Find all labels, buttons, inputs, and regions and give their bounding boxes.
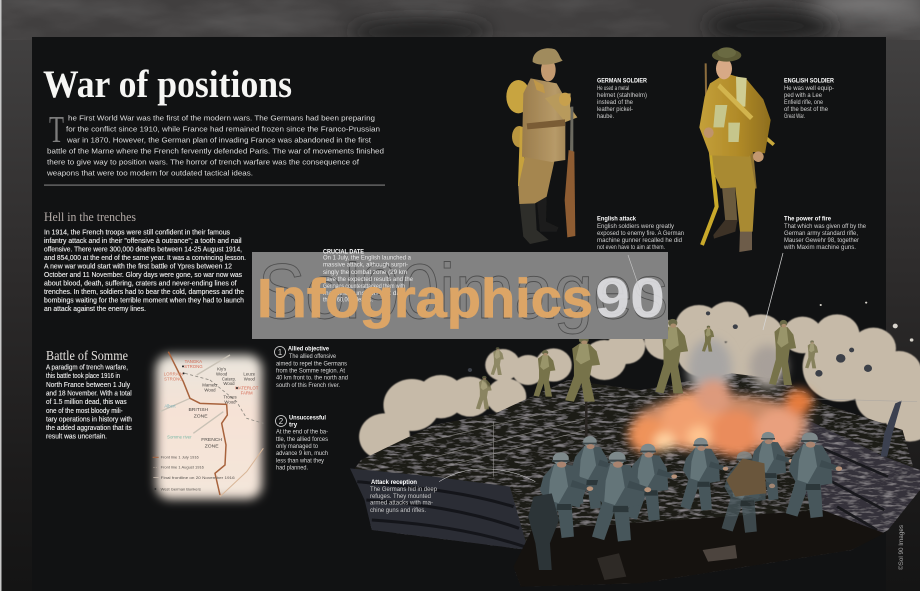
map labels: Leuze	[243, 372, 256, 377]
trench floor	[514, 510, 884, 587]
text: crucial date box: singly the combat zone (29 km	[323, 269, 407, 276]
intro text block: for the conflict since 1910, while France had remained frozen since the Franco-Prussian	[66, 124, 380, 134]
annotation 1: Allied objective: south of this French river.	[276, 382, 340, 389]
text: crucial date box: On 1 July, the English launched a	[323, 254, 411, 262]
text: crucial date box: machine guns. On that day,	[323, 290, 405, 297]
ground: charred slope	[354, 373, 920, 587]
text block: Hell in the trenches: A new war would start with the first battle of Ypres between 12	[44, 262, 232, 270]
text: English attack: English soldiers were greatly	[597, 223, 675, 230]
map labels: Trones	[223, 395, 237, 400]
illustration: English soldier	[699, 47, 775, 252]
callout: Attack reception: refuges. They mounted	[370, 493, 432, 500]
title: War of positions	[43, 63, 292, 106]
annotation 1: Allied objective	[274, 346, 348, 389]
text: The power of fire: German army standard rifle,	[784, 230, 858, 237]
map labels: Caterp.	[222, 376, 236, 381]
text: crucial date box: Germans counterattacked them with	[323, 283, 405, 290]
text block: Hell in the trenches: an attack against the enemy lines.	[44, 304, 146, 313]
text block: Hell in the trenches: In 1914, the French troops were still confident in their famous	[44, 228, 230, 236]
illustration: German soldier	[506, 48, 577, 244]
callout: Attack reception	[370, 479, 438, 514]
text: crucial date box: CRUCIAL DATE	[323, 248, 365, 256]
text: German soldier: haube.	[597, 113, 614, 120]
map legend: Final frontline on 20 November 1916	[161, 475, 236, 480]
trench wall: right planks	[797, 401, 920, 550]
text: crucial date box: there 60,000 deaths.	[323, 296, 373, 304]
map labels	[164, 359, 259, 450]
text: English attack: English attack	[597, 216, 636, 222]
annotation 2: Unsuccessful try: ttle, the allied forces	[276, 436, 328, 443]
text: German soldier: GERMAN SOLDIER	[597, 78, 647, 84]
text: German soldier: instead of the	[597, 99, 633, 106]
map labels: LORRAIN	[164, 372, 183, 377]
arrow: leader line from English attack	[628, 255, 640, 290]
callout: Attack reception: The Germans hid in deep	[370, 486, 438, 493]
map labels: Wood	[223, 381, 235, 386]
icon: number 1: 1	[278, 348, 283, 357]
map legend: Front line 1 August 1916	[161, 465, 205, 470]
intro text block: there to give way to position wars. The horror of trench warfare was the consequence of	[47, 158, 360, 166]
text: The power of fire: with Maxim machine guns.	[783, 244, 856, 251]
annotation 2: Unsuccessful try: only managed to	[276, 443, 318, 450]
credit: ©Sol 90 Images	[898, 525, 905, 570]
heading: Battle of Somme: Battle of Somme	[46, 349, 128, 364]
text: German soldier: He used a metal	[597, 85, 629, 92]
text block: Battle of Somme: tary operations in history with	[46, 414, 132, 423]
watermark: 90: 90	[595, 266, 665, 329]
text: English soldier: ENGLISH SOLDIER	[784, 78, 834, 84]
text block: Hell in the trenches: about blood, death, suffering, craters and never-ending lines of	[44, 278, 237, 288]
text block: Hell in the trenches: and 854,000 at the end of the same year. It was a convincing lesson.	[44, 253, 246, 262]
map labels: ZONE	[194, 414, 208, 420]
text block: Battle of Somme: A paradigm of trench warfare,	[46, 362, 128, 372]
annotation 2: Unsuccessful try: At the end of the ba-	[276, 428, 328, 436]
barbed wire	[405, 390, 917, 477]
annotation 2: Unsuccessful try: advance 9 km, much	[276, 450, 328, 457]
heading: Hell in the trenches: Hell in the trenches	[44, 209, 136, 224]
callout: Attack reception: armed attacks with ma-	[370, 500, 433, 506]
text block: Hell in the trenches	[44, 228, 246, 313]
map labels: STRONG	[164, 376, 183, 381]
annotation 2: Unsuccessful try: Unsuccessful	[289, 414, 326, 422]
annotation 1: Allied objective: The allied offensive	[289, 353, 336, 360]
debris specks	[820, 302, 913, 342]
text block: Hell in the trenches: October and 11 November. Glory days were gone, so war now was	[44, 270, 242, 279]
text: crucial date box	[323, 248, 413, 304]
watermark: Infographics: Infographics	[257, 267, 593, 329]
text: The power of fire: Mauser Gewehr 98, together	[784, 237, 860, 244]
map labels: Wood	[224, 400, 236, 405]
text block: Battle of Somme: and 18 November. With a total	[46, 388, 132, 398]
text: English soldier	[784, 78, 834, 120]
text block: Battle of Somme: North France between 1 July	[46, 380, 130, 389]
map labels: Wood	[244, 376, 256, 381]
intro text block: he First World War was the first of the modern wars. The Germans had been preparing	[68, 114, 375, 122]
text block: Hell in the trenches: bombings waiting for the terrible moment when they had to launch	[44, 296, 244, 304]
text: English soldier: He was well equip-	[784, 85, 834, 92]
icon: drop cap T: T	[49, 109, 64, 151]
text: German soldier: helmet (stahlhelm)	[597, 92, 647, 99]
map: Battle of Somme front lines	[153, 352, 263, 499]
map labels: STRONG	[184, 364, 203, 369]
text: English attack: not even have to aim at them.	[597, 244, 665, 251]
text block: Battle of Somme: result was uncertain.	[46, 432, 107, 441]
map labels: FRENCH	[201, 437, 222, 443]
text block: Battle of Somme: this battle took place 1916 in	[46, 371, 120, 380]
annotation 2: Unsuccessful try: try	[289, 422, 298, 428]
text: English soldier: ped with a Lee	[784, 92, 822, 99]
annotation 1: Allied objective: Allied objective	[288, 346, 329, 352]
annotation 1: Allied objective: 40 km front to. the north and	[276, 375, 348, 382]
map labels: FARM	[241, 391, 253, 396]
map labels: BRITISH	[188, 407, 209, 413]
intro text block: battle of the Marne where the French fervently defended Paris. The war of movements finished	[47, 146, 384, 156]
callout: Attack reception: chine guns and rifles.	[370, 507, 426, 514]
map labels: Kiy's	[217, 366, 226, 371]
front line	[168, 352, 227, 495]
arrow: leader line to power of fire	[763, 253, 783, 330]
map legend: West German Bunkers	[161, 486, 201, 491]
map legend: Front line 1 July 1916	[161, 455, 200, 460]
text block: Hell in the trenches: infantry attack and in their "offensive à outrance"; a tooth and nail	[44, 236, 242, 245]
intro text block	[46, 109, 384, 178]
intro text block: war in 1870. However, the German plan of invading France was abandoned in the first	[66, 136, 372, 144]
text: English soldier: of the best of the	[784, 106, 828, 113]
explosion smoke and fire	[628, 338, 813, 457]
map legend	[153, 455, 236, 491]
annotation 1: Allied objective: aimed to repel the Germans	[276, 360, 347, 367]
text: English soldier: Enfield rifle, one	[784, 99, 823, 106]
text: English attack	[597, 216, 684, 251]
text block: Battle of Somme: of 1.5 million dead, this was	[46, 397, 127, 406]
illustration: trench battle diorama	[350, 302, 920, 587]
map labels: Albert	[164, 403, 176, 408]
text block: Hell in the trenches: offensive. There were 300,000 deaths between 14-25 August 1914,	[44, 244, 242, 254]
text: English soldier: Great War.	[784, 113, 805, 120]
map labels: ZONE	[205, 444, 219, 450]
text block: Battle of Somme	[46, 362, 132, 441]
text: English attack: machine gunner recalled he did	[597, 237, 682, 244]
watermark: outlined brand: Sol90images	[258, 247, 668, 335]
smoke clouds	[359, 302, 920, 460]
intro text block: weapons that were too modern for outdated tactical ideas.	[46, 168, 253, 178]
map labels: Mametz	[202, 382, 218, 387]
text block: Battle of Somme: the added aggravation that its	[46, 423, 132, 432]
text: English attack: exposed to enemy fire. A German	[597, 230, 684, 237]
map labels: Wood	[216, 371, 228, 376]
trench wall: left logs	[350, 468, 528, 550]
text: German soldier: leather pickel-	[597, 106, 633, 113]
annotation 2: Unsuccessful try: had planned.	[276, 464, 308, 472]
text: The power of fire: That which was given off by the	[784, 223, 866, 230]
map labels: WATERLOT	[235, 386, 259, 391]
annotation 2: Unsuccessful try	[276, 414, 328, 472]
map labels: TANGKA	[185, 359, 202, 364]
text block: Battle of Somme: one of the most bloody mili-	[46, 406, 123, 415]
text block: Hell in the trenches: trenches. In them, soldiers had to bear the cold, dampness and the	[44, 287, 244, 296]
annotation 1: Allied objective: from the Somme region. At	[276, 368, 345, 374]
icon: number 2: 2	[279, 417, 284, 426]
text: The power of fire	[783, 216, 866, 251]
annotation 2: Unsuccessful try: less than what they	[276, 457, 325, 464]
soldiers: German defenders	[528, 432, 842, 570]
text: crucial date box: massive attack, although surpri-	[323, 262, 408, 268]
watermark band	[252, 247, 668, 339]
text: crucial date box: gave the expected results and the	[323, 276, 413, 283]
text: German soldier	[597, 78, 647, 120]
callout: Attack reception: Attack reception	[371, 479, 417, 486]
map labels: Wood	[204, 387, 216, 392]
callout line: Attack reception	[439, 469, 535, 482]
map labels: Somme river	[167, 435, 192, 440]
text: The power of fire: The power of fire	[784, 216, 831, 222]
soldiers: advancing English troops	[476, 319, 818, 409]
